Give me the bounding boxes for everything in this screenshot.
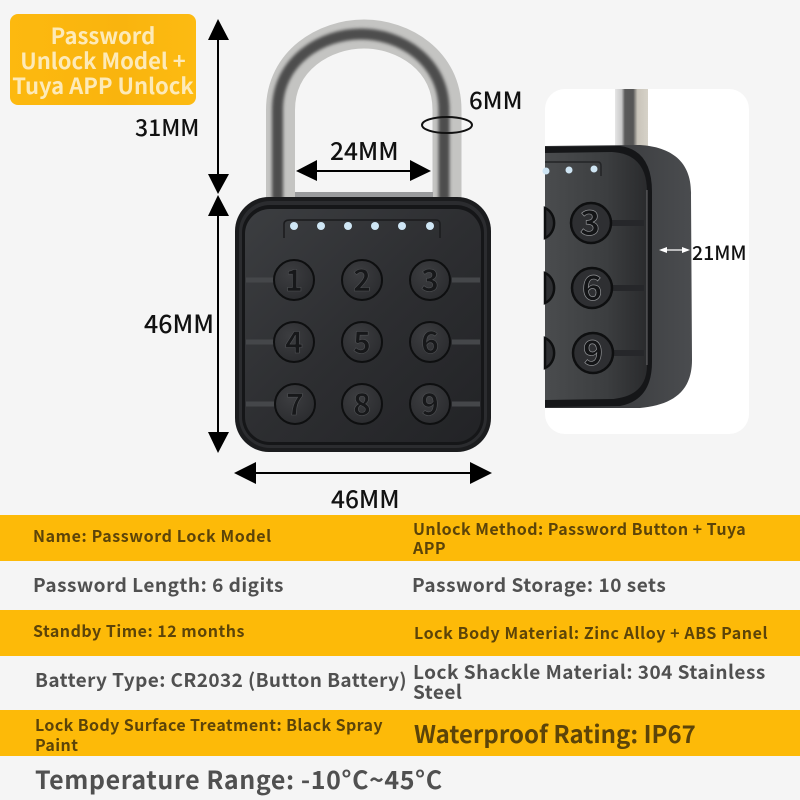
side view lock body <box>542 145 692 408</box>
label: shackle thickness: 6MM <box>469 81 523 116</box>
keypad digits <box>285 256 439 424</box>
side view shackle <box>615 89 648 147</box>
arrow: side depth <box>659 247 690 253</box>
keypad buttons <box>274 260 450 424</box>
spec: standby time: Standby Time: 12 months <box>33 618 245 642</box>
spec: surface treatment: Lock Body Surface Treatment: Black Spray <box>35 712 383 736</box>
spec: shackle material <box>413 658 766 705</box>
spec: waterproof rating: Waterproof Rating: IP67 <box>414 715 696 750</box>
badge: model name: Tuya APP Unlock <box>12 69 194 101</box>
keypad digits: 5 <box>353 318 371 362</box>
keypad digits: 3 <box>421 256 439 300</box>
side view card <box>542 89 749 434</box>
lock body front <box>235 192 491 452</box>
spec: unlock method <box>413 516 746 559</box>
shackle <box>278 34 447 200</box>
label: depth: 21MM <box>692 237 747 266</box>
spec: shackle material: Steel <box>413 678 462 705</box>
spec: surface treatment <box>35 712 383 756</box>
spec: temperature range: Temperature Range: -10°C~45°C <box>35 761 443 797</box>
spec: body material: Lock Body Material: Zinc Alloy + ABS Panel <box>414 620 768 644</box>
diagram artwork: lock front view, side view and dimension arrows <box>208 19 749 484</box>
spec: unlock method: Unlock Method: Password Button + Tuya <box>413 516 746 540</box>
spec: surface treatment: Paint <box>35 732 78 756</box>
ring marker: shackle thickness <box>422 117 472 133</box>
LED indicator row <box>290 222 434 230</box>
side view lock body: 9 <box>583 326 603 375</box>
spec: password storage: Password Storage: 10 sets <box>412 571 666 598</box>
label: shackle width: 24MM <box>330 133 399 168</box>
spec: password length: Password Length: 6 digits <box>33 571 284 598</box>
keypad digits: 8 <box>353 380 371 424</box>
label: body height: 46MM <box>144 305 214 341</box>
arrow: shackle height <box>208 19 229 194</box>
badge: model name: Unlock Model + <box>20 44 186 76</box>
keypad digits: 1 <box>285 256 303 300</box>
side view lock body: 3 <box>580 196 600 245</box>
label: shackle height: 31MM <box>135 109 199 143</box>
band: row 1 <box>0 515 800 561</box>
spec: shackle material: Lock Shackle Material: 304 Stainless <box>413 658 766 685</box>
spec: unlock method: APP <box>413 535 446 559</box>
keypad digits: 7 <box>286 380 304 424</box>
spec: battery type: Battery Type: CR2032 (Button Battery) <box>35 666 407 693</box>
keypad digits: 2 <box>353 256 371 300</box>
label: body width: 46MM <box>331 481 400 516</box>
badge: model name <box>10 14 196 105</box>
arrow: shackle inner width <box>296 160 431 181</box>
keypad digits: 6 <box>421 318 439 362</box>
keypad digits: 9 <box>421 380 439 424</box>
spec: name: Name: Password Lock Model <box>33 523 272 547</box>
band: row 3 <box>0 610 800 656</box>
arrow: body height <box>208 195 229 453</box>
keypad digits: 4 <box>285 318 303 362</box>
badge: model name: Password <box>51 19 155 51</box>
arrow: body width <box>234 462 492 484</box>
band: row 5 <box>0 710 800 756</box>
side view lock body: 6 <box>582 261 602 310</box>
